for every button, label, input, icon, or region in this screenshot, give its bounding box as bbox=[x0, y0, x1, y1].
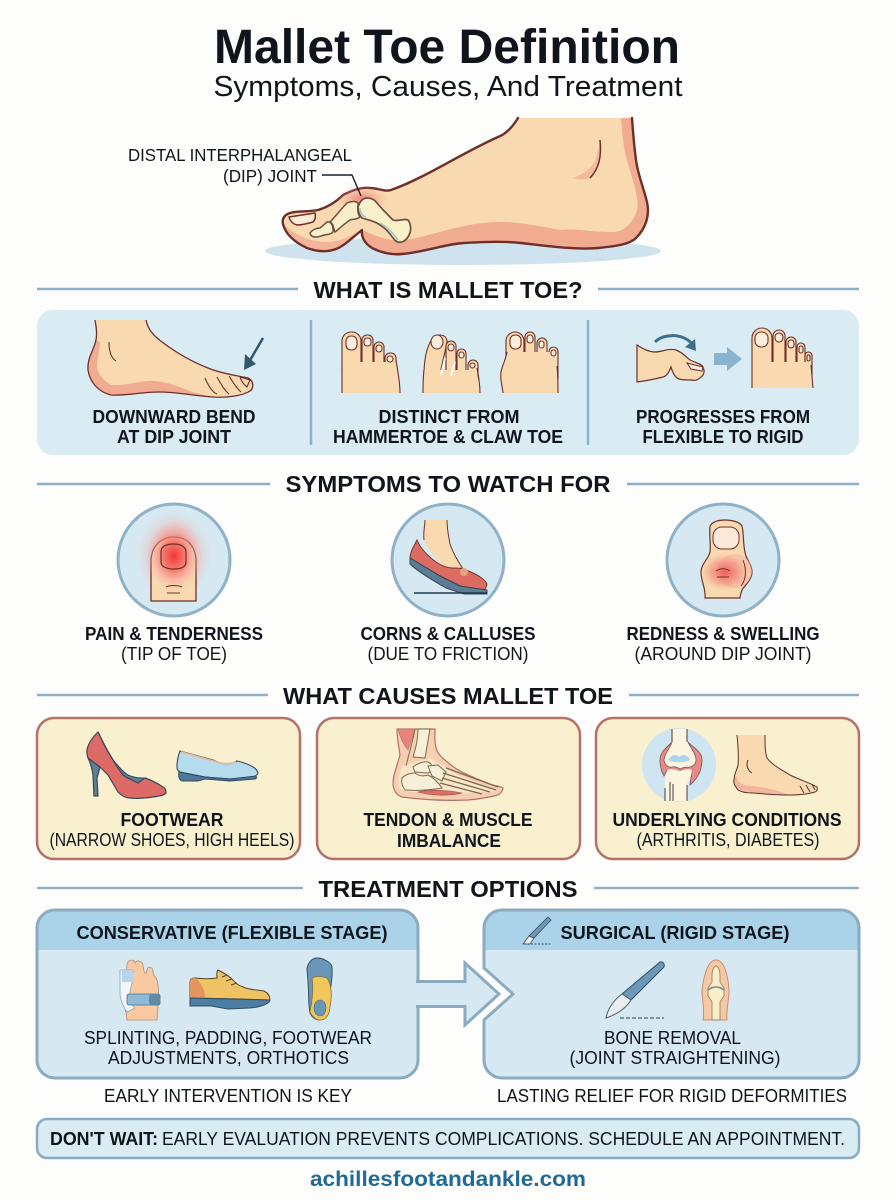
website url: achillesfootandankle.com bbox=[310, 1168, 586, 1191]
call to action banner: DON'T WAIT: bbox=[50, 1129, 158, 1149]
panel: surgical: BONE REMOVAL bbox=[604, 1028, 741, 1048]
ankle crease bbox=[573, 140, 600, 180]
symptom: corns and calluses bbox=[360, 504, 536, 664]
label: DIP joint: DISTAL INTERPHALANGEAL bbox=[128, 145, 352, 165]
icon: flat shoe bbox=[177, 751, 258, 781]
distal bone bbox=[310, 222, 333, 237]
proximal bone bbox=[358, 198, 411, 242]
icon: red toe bbox=[118, 504, 230, 616]
toenail bbox=[289, 213, 315, 225]
panel: conservative bbox=[37, 910, 418, 1078]
icon: high heel bbox=[87, 732, 166, 798]
hero illustration: foot with DIP joint bbox=[128, 118, 661, 265]
icon: swollen toe bbox=[667, 504, 779, 616]
caption: distinct from: DISTINCT FROM bbox=[378, 407, 520, 427]
panel: underlying conditions: UNDERLYING CONDITIONS bbox=[612, 810, 842, 830]
panel: conservative: SPLINTING, PADDING, FOOTWEAR bbox=[84, 1028, 372, 1048]
icon: arthritic knee bbox=[642, 728, 716, 802]
caption: progresses: FLEXIBLE TO RIGID bbox=[642, 427, 804, 447]
panel: footwear: (NARROW SHOES, HIGH HEELS) bbox=[50, 830, 294, 850]
caption: distinct from bbox=[333, 407, 563, 447]
icon: scalpel bbox=[606, 962, 664, 1018]
panel: surgical bbox=[484, 910, 859, 1078]
call to action banner bbox=[37, 1119, 859, 1158]
caption: downward bend: DOWNWARD BEND bbox=[92, 407, 256, 427]
foot A bbox=[342, 332, 400, 393]
panel: surgical: SURGICAL (RIGID STAGE) bbox=[560, 923, 790, 943]
panel: footwear bbox=[37, 718, 300, 859]
panel: footwear: FOOTWEAR bbox=[120, 810, 224, 830]
icon: small scalpel bbox=[523, 917, 552, 944]
icon: foot anatomy bbox=[393, 729, 503, 800]
note: lasting relief: LASTING RELIEF FOR RIGID DEFORMITIES bbox=[497, 1086, 847, 1106]
symptom: corns and calluses: CORNS & CALLUSES bbox=[360, 624, 536, 644]
panel: surgical: (JOINT STRAIGHTENING) bbox=[570, 1048, 780, 1068]
panel: tendon and muscle: TENDON & MUSCLE bbox=[364, 810, 532, 830]
panel: tendon and muscle: IMBALANCE bbox=[397, 831, 501, 851]
caption: distinct from: HAMMERTOE & CLAW TOE bbox=[333, 427, 563, 447]
symptom: redness and swelling bbox=[626, 504, 820, 664]
symptom: redness and swelling: (AROUND DIP JOINT) bbox=[634, 644, 812, 664]
call to action banner: EARLY EVALUATION PREVENTS COMPLICATIONS. SCHEDULE AN APPOINTMENT. bbox=[162, 1129, 845, 1149]
icon: foot bbox=[734, 735, 817, 795]
panel: conservative: ADJUSTMENTS, ORTHOTICS bbox=[108, 1048, 349, 1068]
caption: downward bend bbox=[92, 407, 256, 447]
panel: what is mallet toe bbox=[37, 310, 859, 455]
icon: toe splint bbox=[120, 960, 160, 1020]
foot body bbox=[283, 118, 648, 254]
symptom: redness and swelling: REDNESS & SWELLING bbox=[626, 624, 820, 644]
icon: three toe comparisons bbox=[342, 332, 558, 393]
symptom: pain and tenderness: PAIN & TENDERNESS bbox=[85, 624, 263, 644]
label: DIP joint bbox=[128, 145, 361, 196]
caption: progresses: PROGRESSES FROM bbox=[636, 407, 810, 427]
subtitle: Symptoms, Causes, And Treatment bbox=[214, 71, 682, 103]
symptom: pain and tenderness: (TIP OF TOE) bbox=[121, 644, 227, 664]
heading: symptoms: SYMPTOMS TO WATCH FOR bbox=[286, 471, 611, 497]
title: Mallet Toe Definition bbox=[214, 21, 680, 74]
foot C bbox=[501, 332, 558, 393]
panel: tendon and muscle bbox=[317, 718, 580, 859]
icon: flexible to rigid progression bbox=[637, 328, 813, 388]
foot outline bbox=[283, 118, 648, 254]
heading: causes: WHAT CAUSES MALLET TOE bbox=[283, 683, 613, 709]
note: early intervention: EARLY INTERVENTION IS KEY bbox=[104, 1086, 352, 1106]
icon: shoe bbox=[190, 970, 270, 1009]
joint redness bbox=[336, 186, 388, 212]
icon: insole bbox=[307, 958, 332, 1020]
icon: straightened toe bones bbox=[702, 960, 729, 1020]
panel: underlying conditions bbox=[596, 718, 859, 859]
label: DIP joint: (DIP) JOINT bbox=[223, 166, 317, 186]
middle bone bbox=[330, 202, 360, 232]
foot shading bbox=[362, 118, 648, 254]
icon: side foot with downward arrow bbox=[88, 320, 263, 397]
symptom: corns and calluses: (DUE TO FRICTION) bbox=[368, 644, 528, 664]
panel: underlying conditions: (ARTHRITIS, DIABETES) bbox=[636, 830, 820, 850]
arrow: conservative to surgical bbox=[415, 963, 499, 1025]
symptom: pain and tenderness bbox=[85, 504, 263, 664]
icon: foot in shoe bbox=[392, 504, 504, 616]
caption: downward bend: AT DIP JOINT bbox=[117, 427, 231, 447]
heading: what is mallet toe: WHAT IS MALLET TOE? bbox=[314, 277, 582, 303]
ground shadow bbox=[265, 237, 661, 265]
foot B bbox=[423, 335, 480, 393]
heading: treatment: TREATMENT OPTIONS bbox=[318, 876, 578, 902]
caption: progresses bbox=[636, 407, 810, 447]
panel: conservative: CONSERVATIVE (FLEXIBLE STAGE) bbox=[76, 923, 388, 943]
